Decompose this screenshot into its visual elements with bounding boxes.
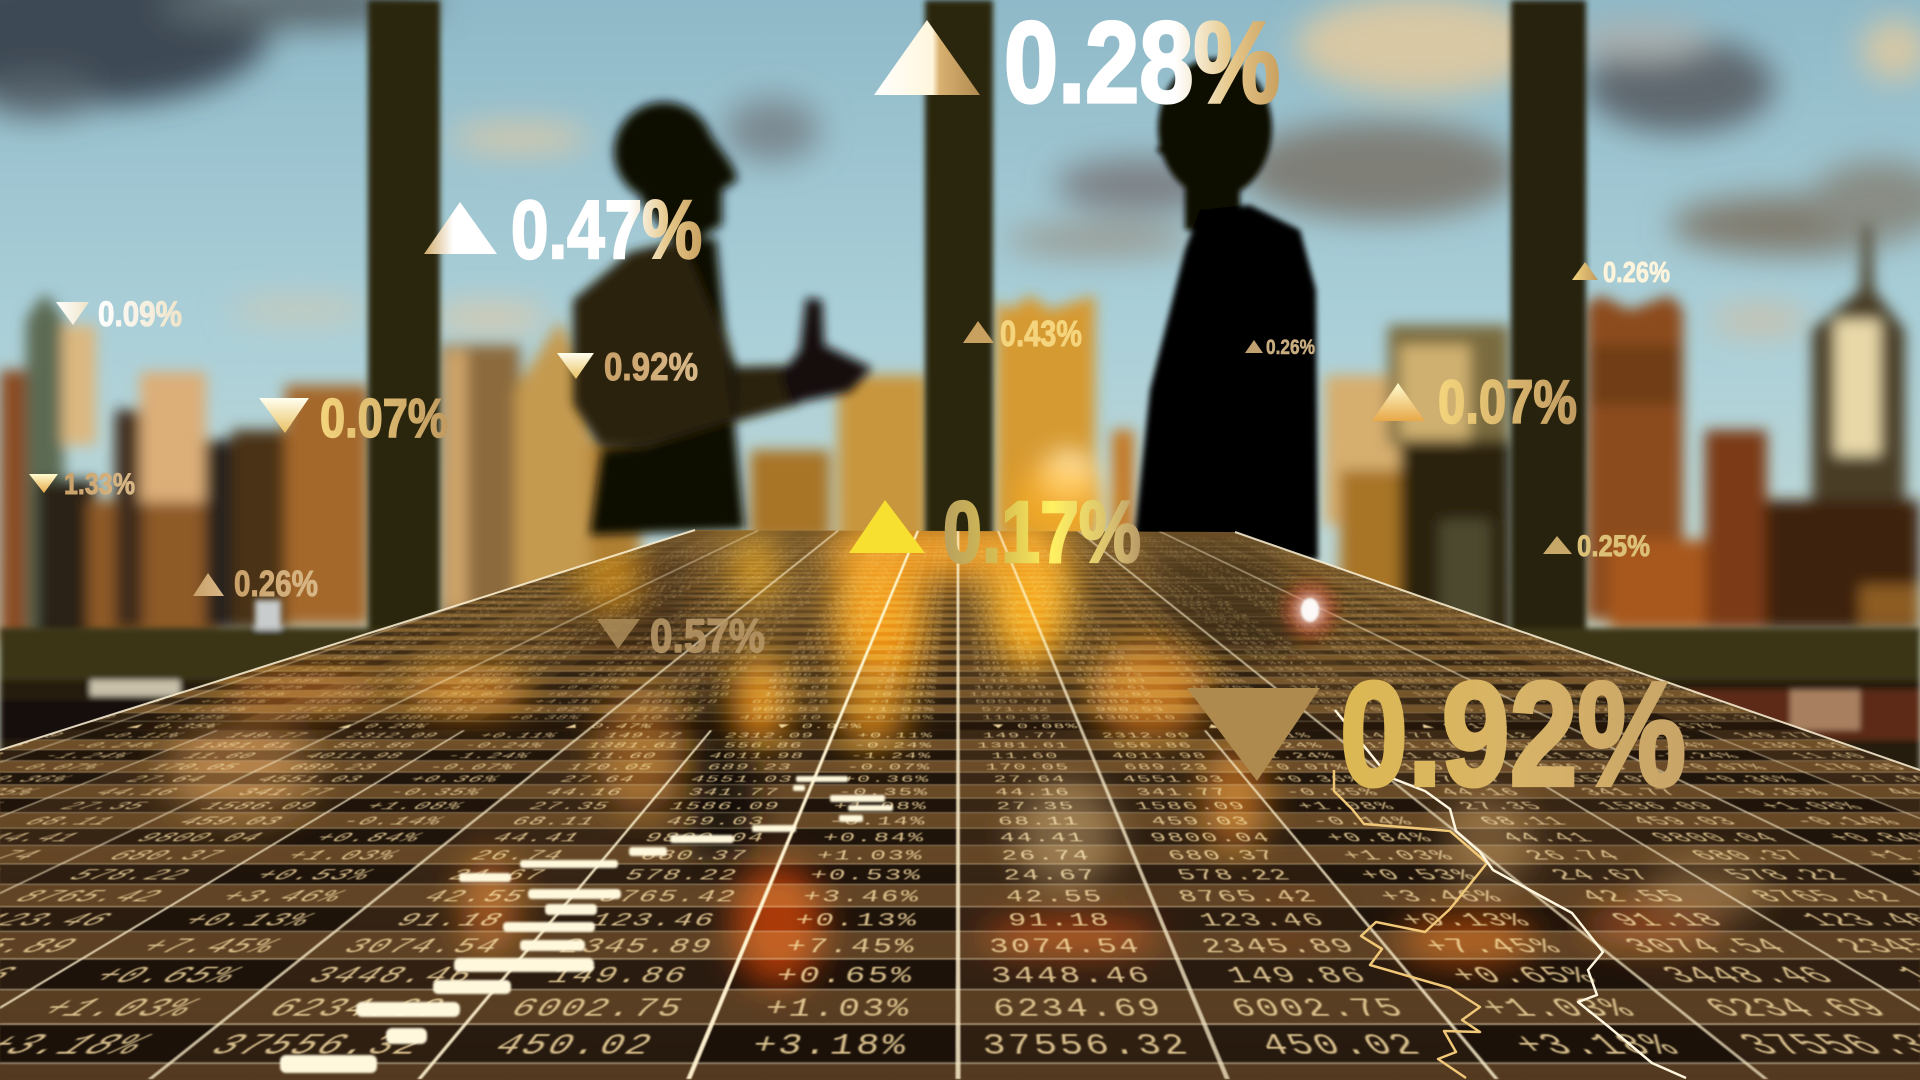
indicator: up 0.26% small: 0.26% [1266, 336, 1315, 359]
table surface colour and reflections [0, 530, 1920, 1080]
dark header row with index changes: ▲ 0.26% [1204, 722, 1297, 730]
indicator: up 0.47%: 0.47% [511, 183, 702, 276]
indicator: up 0.17% [849, 484, 1141, 581]
stock chart line: white [1335, 710, 1686, 1078]
alternating table cells and row rules [0, 531, 1920, 1079]
far rows of figures [19, 537, 1784, 721]
indicator: up 0.26% right: 0.26% [1603, 257, 1670, 289]
city skyline [0, 225, 1920, 640]
column rules [0, 531, 1920, 1079]
dark header row with index changes: ▲ 0.35% [120, 722, 226, 730]
indicator: up 0.43%: 0.43% [1000, 313, 1082, 354]
indicator: down 1.33% [29, 468, 135, 501]
silhouette: right man [1132, 58, 1318, 560]
indicator: up 0.26% small [1245, 336, 1315, 359]
indicator: up 0.26% lower left: 0.26% [234, 563, 318, 604]
indicator: down 0.92% left [557, 346, 698, 389]
indicator: up 0.28% [874, 0, 1280, 127]
indicator: up 0.25% [1543, 530, 1650, 563]
dark header row with index changes [0, 721, 1920, 730]
silhouette: left man [573, 102, 872, 535]
indicator: up 0.17%: 0.17% [943, 484, 1141, 581]
indicator: down 0.57%: 0.57% [650, 609, 765, 662]
dark header row with index changes: ▼ 0.57% [1625, 722, 1729, 730]
indicator: up 0.43% [963, 313, 1082, 354]
indicator: down 0.07% left: 0.07% [320, 387, 448, 449]
dark header row with index changes: ▼ 0.92% [775, 722, 864, 730]
table grid plane with market figures [0, 530, 1920, 1080]
indicator: down 1.33%: 1.33% [64, 468, 135, 501]
indicator: up 0.07% right [1372, 368, 1577, 436]
near rows of figures [0, 731, 1920, 1063]
haze softening the far rows [190, 530, 1672, 704]
indicator: down 0.92% large: 0.92% [1340, 652, 1686, 817]
glowing reflections on the table surface [146, 530, 1776, 1006]
sun glare on building [1015, 451, 1105, 540]
dark header row with index changes: ▲ 0.47% [562, 722, 656, 730]
candlestick bars [280, 776, 893, 1073]
table grid plane wrapper [0, 530, 1920, 1080]
indicator: down 0.07% left [259, 387, 448, 449]
indicator: up 0.28%: 0.28% [1004, 0, 1280, 127]
indicator: down 0.09% [56, 295, 182, 334]
light flare on table [1286, 584, 1334, 636]
dark header row with index changes: ▲ 0.17% [1415, 722, 1513, 730]
indicator: down 0.92% left: 0.92% [604, 346, 698, 389]
clouds [0, 0, 1920, 332]
indicator: down 0.92% large [1187, 652, 1686, 817]
dark header row with index changes: ▲ 0.28% [333, 722, 433, 730]
indicator: down 0.09%: 0.09% [98, 295, 182, 334]
indicator: up 0.26% lower left [193, 563, 318, 604]
stock chart line: golden [1334, 770, 1487, 1078]
indicator: up 0.26% right [1572, 257, 1670, 289]
indicator: up 0.47% [424, 183, 702, 276]
indicator: up 0.07% right: 0.07% [1438, 368, 1577, 436]
dark header row with index changes: ▼ 0.08% [992, 722, 1080, 730]
indicator: up 0.25%: 0.25% [1577, 530, 1650, 563]
indicator: down 0.57% [597, 609, 765, 662]
table edges [0, 530, 1920, 770]
panel: perspective trading table [0, 530, 1920, 1080]
